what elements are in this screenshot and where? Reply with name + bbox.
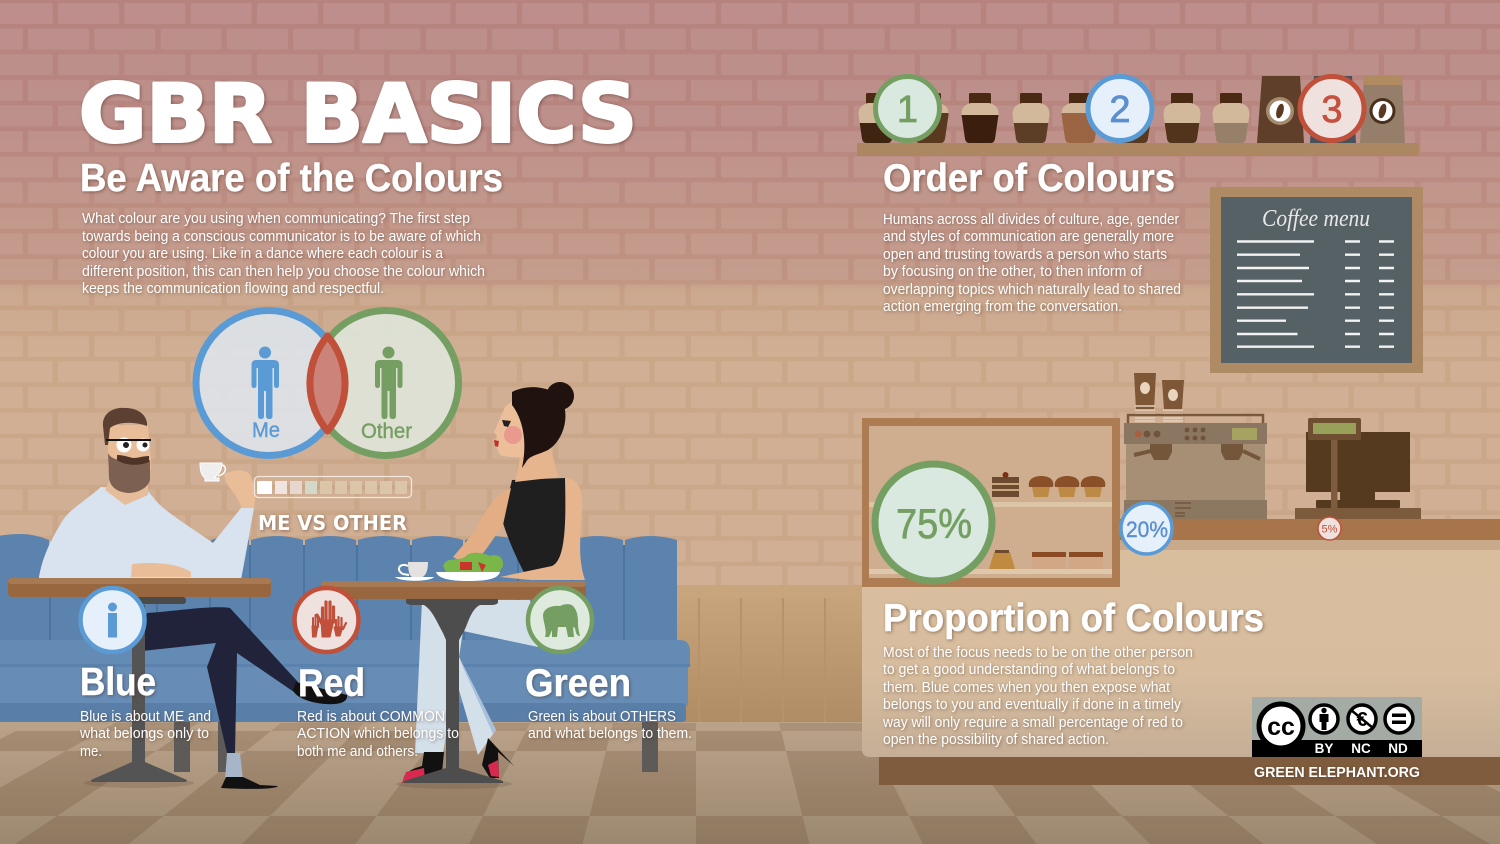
man: trousers bbox=[133, 607, 298, 753]
paper cups bbox=[1134, 373, 1184, 421]
woman: hair bbox=[512, 387, 565, 468]
red description bbox=[297, 709, 459, 760]
overlap lens bbox=[310, 336, 345, 431]
order badge 2: 2 bbox=[1109, 89, 1131, 131]
licence labels: ND bbox=[1388, 741, 1408, 756]
heading: proportion of colours: Proportion of Colours bbox=[883, 597, 1264, 640]
woman: far arm bbox=[453, 488, 511, 567]
right table bbox=[321, 581, 586, 789]
order text block: by focusing on the other, to then inform of bbox=[883, 264, 1143, 280]
woman: eye bbox=[502, 420, 511, 427]
green description bbox=[528, 709, 692, 742]
woman: trousers bbox=[415, 600, 538, 755]
nc icon: € bbox=[1356, 709, 1368, 731]
order badge 2 bbox=[1088, 76, 1152, 140]
man: moustache bbox=[117, 455, 149, 465]
proportion badge 20%: 20% bbox=[1126, 517, 1168, 542]
coffee bag tan bbox=[1360, 76, 1405, 143]
jar 5 bbox=[1062, 93, 1096, 143]
label: me vs other: ME VS OTHER bbox=[258, 511, 407, 535]
counter bbox=[862, 519, 1500, 785]
shelf board bbox=[857, 143, 1419, 156]
woman: shoes bbox=[402, 738, 514, 783]
counter base bbox=[879, 757, 1500, 785]
menu title: Coffee menu bbox=[1262, 206, 1370, 232]
cakes top shelf bbox=[992, 472, 1019, 497]
woman: dress bbox=[503, 478, 576, 580]
man: glasses bbox=[106, 438, 151, 452]
jar 3 bbox=[960, 93, 1000, 143]
label: me: Me bbox=[252, 419, 280, 442]
man: beard bbox=[108, 453, 150, 493]
proportion badge 75% bbox=[875, 464, 992, 581]
proportion text block bbox=[882, 645, 1193, 748]
woman: neck bbox=[515, 445, 558, 482]
man: shoe front bbox=[293, 682, 347, 704]
chalkboard coffee menu bbox=[1210, 187, 1423, 373]
icon: blue info badge bbox=[80, 588, 144, 652]
website credit: GREEN ELEPHANT.ORG bbox=[1254, 765, 1420, 781]
order text block: and styles of communication are generally more bbox=[883, 229, 1174, 245]
icon: red hands badge bbox=[294, 588, 358, 652]
venn diagram me and other bbox=[196, 310, 458, 456]
shelf with jars bbox=[857, 76, 1419, 156]
red description: ACTION which belongs to bbox=[297, 726, 459, 742]
red description: both me and others. bbox=[297, 744, 418, 760]
counter body bbox=[862, 550, 1500, 757]
heading: green: Green bbox=[525, 662, 631, 705]
proportion text block: belongs to you and eventually if done in a timely bbox=[883, 697, 1182, 713]
proportion badge 5%: 5% bbox=[1322, 524, 1338, 536]
woman sitting bbox=[395, 382, 585, 783]
cakes bottom shelf bbox=[989, 550, 1103, 569]
red description: Red is about COMMON bbox=[297, 709, 445, 725]
jar 7 bbox=[1162, 93, 1202, 143]
intro text block: different position, this can then help you choose the colour which bbox=[82, 264, 485, 280]
intro text block: colour you are using. Like in a dance where each colour is a bbox=[82, 246, 444, 262]
coffee machine bbox=[1124, 415, 1267, 519]
woman: blush and lips bbox=[494, 426, 522, 447]
cash register bbox=[1295, 418, 1421, 519]
man: hair bbox=[103, 408, 147, 445]
heading: red: Red bbox=[298, 662, 365, 705]
order text block: overlapping topics which naturally lead to shared bbox=[883, 282, 1181, 298]
blue description: me. bbox=[80, 744, 102, 760]
proportion badge 20% bbox=[1121, 503, 1172, 554]
man: shirt bbox=[39, 487, 254, 590]
jar 4 bbox=[1011, 93, 1051, 143]
icon: green elephant badge bbox=[528, 588, 592, 652]
intro text block: What colour are you using when communicating? The first step bbox=[82, 211, 470, 227]
woman: face bbox=[494, 395, 540, 457]
intro text block: keeps the communication flowing and respectful. bbox=[82, 281, 384, 297]
nd icon bbox=[1385, 705, 1413, 733]
order text block: open and trusting towards a person who starts bbox=[883, 247, 1167, 263]
blue bench bbox=[0, 534, 690, 772]
heading: blue: Blue bbox=[80, 661, 156, 704]
chequered floor bbox=[0, 722, 1500, 844]
order text block bbox=[883, 212, 1181, 315]
title: GBR BASICS bbox=[79, 68, 637, 160]
order badge 3 bbox=[1300, 76, 1364, 140]
heading: order of colours: Order of Colours bbox=[883, 157, 1175, 200]
woman: bun bbox=[546, 382, 574, 410]
blue description bbox=[79, 709, 211, 760]
counter strip bbox=[1119, 540, 1500, 550]
wainscot wall panelling bbox=[670, 585, 870, 725]
blue description: what belongs only to bbox=[79, 726, 209, 742]
intro text block: towards being a conscious communicator is to be aware of which bbox=[82, 229, 481, 245]
cc icon bbox=[1259, 704, 1303, 748]
icon: me person bbox=[252, 346, 279, 419]
by icon bbox=[1310, 705, 1338, 733]
licence labels: NC bbox=[1351, 741, 1371, 756]
man: neck and forearm bbox=[105, 470, 255, 577]
woman: near arm bbox=[500, 478, 585, 580]
label: other: Other bbox=[361, 420, 412, 443]
nc icon bbox=[1348, 705, 1376, 733]
man sitting bbox=[39, 408, 347, 789]
man: face bbox=[108, 425, 151, 470]
order badge 3: 3 bbox=[1321, 89, 1343, 131]
order badge 1: 1 bbox=[897, 89, 918, 131]
green description: Green is about OTHERS bbox=[528, 709, 676, 725]
coffee bag dark brown bbox=[1257, 76, 1304, 143]
proportion text block: Most of the focus needs to be on the other person bbox=[883, 645, 1193, 661]
intro text block bbox=[82, 211, 485, 297]
proportion text block: open the possibility of shared action. bbox=[883, 732, 1109, 748]
licence labels: BY bbox=[1315, 741, 1333, 756]
heading: be aware: Be Aware of the Colours bbox=[80, 157, 503, 200]
salad plate bbox=[436, 553, 503, 581]
jar 2 bbox=[916, 93, 948, 143]
proportion badge 75%: 75% bbox=[896, 500, 972, 547]
order text block: Humans across all divides of culture, age, gender bbox=[883, 212, 1179, 228]
coffee cup and saucer bbox=[395, 562, 434, 581]
icon: other person bbox=[375, 346, 402, 419]
jar 1 bbox=[858, 93, 892, 143]
counter top bbox=[1119, 519, 1500, 540]
me vs other progress bar bbox=[254, 476, 412, 498]
green description: and what belongs to them. bbox=[528, 726, 692, 742]
proportion text block: to get a good understanding of what belongs to bbox=[883, 662, 1175, 678]
proportion text block: way will only require a small percentage of red to bbox=[882, 715, 1183, 731]
proportion badge 5% bbox=[1318, 517, 1341, 540]
cc icon: cc bbox=[1267, 713, 1295, 741]
order badge 1 bbox=[876, 76, 940, 140]
left table bbox=[8, 578, 271, 788]
order text block: action emerging from the conversation. bbox=[883, 299, 1122, 315]
pastry display case bbox=[862, 418, 1120, 587]
coffee bag slate bbox=[1310, 76, 1356, 143]
muffins bbox=[1029, 476, 1105, 497]
jar 6 bbox=[1122, 126, 1150, 143]
jar 8 bbox=[1211, 93, 1251, 143]
blue description: Blue is about ME and bbox=[80, 709, 211, 725]
man: coffee cup bbox=[200, 463, 225, 481]
licence labels bbox=[1315, 741, 1408, 756]
creative commons badge bbox=[1252, 697, 1422, 757]
man: sock and shoe bbox=[221, 753, 278, 789]
proportion text block: them. Blue comes when you then expose what bbox=[883, 680, 1170, 696]
